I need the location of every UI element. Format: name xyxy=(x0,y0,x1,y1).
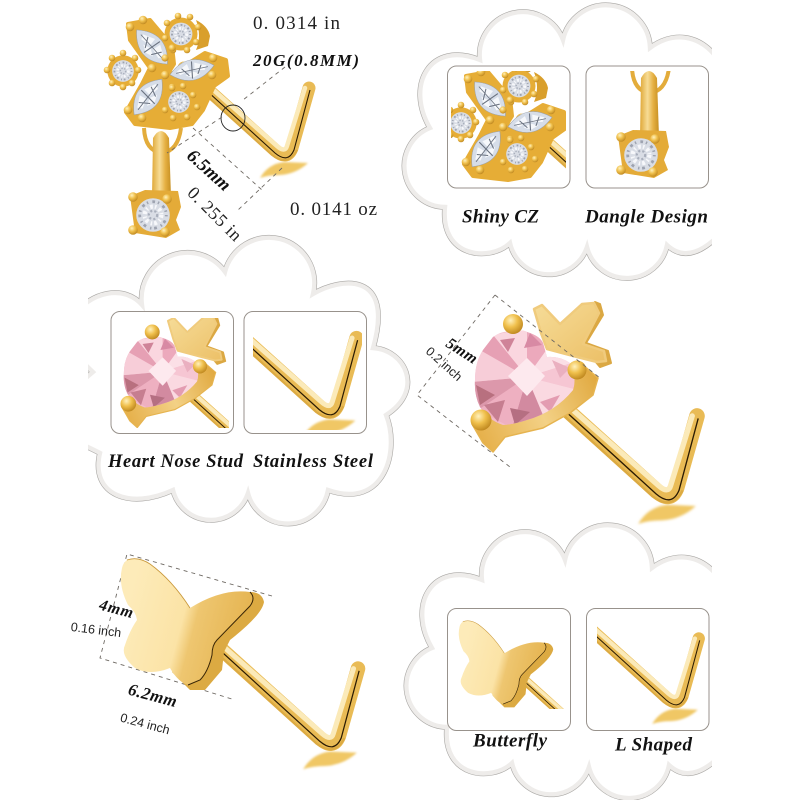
label: Butterfly: Butterfly xyxy=(472,730,548,752)
dimension lines xyxy=(100,554,272,700)
card: butterfly xyxy=(447,608,571,731)
card: dangle design xyxy=(586,66,708,188)
label: Shiny CZ: Shiny CZ xyxy=(462,206,539,228)
dimension lines xyxy=(167,67,285,210)
product: flower nose stud with dimensions xyxy=(104,13,377,245)
weight 0.0141 oz: 0. 0141 oz xyxy=(290,199,377,220)
card: heart nose stud xyxy=(110,311,234,434)
butterfly stud xyxy=(121,559,359,769)
size 6.2mm: 6.2mm xyxy=(126,680,180,711)
length 6.5mm: 6.5mm xyxy=(182,146,234,196)
flower cluster head xyxy=(104,13,228,128)
card: stainless steel xyxy=(244,311,367,434)
card: L shaped xyxy=(580,608,709,730)
panel: heart feature cloud xyxy=(60,238,407,524)
cloud outline xyxy=(406,525,724,798)
card: shiny CZ xyxy=(447,66,570,188)
length 0.255 in: 0. 255 in xyxy=(184,183,246,245)
label: Stainless Steel: Stainless Steel xyxy=(253,452,374,472)
panel: butterfly feature cloud xyxy=(406,525,724,798)
cloud outline xyxy=(404,5,722,278)
size 4mm: 4mm xyxy=(96,596,136,622)
panel: flower feature cloud xyxy=(404,5,722,278)
size 0.16 inch: 0.16 inch xyxy=(70,620,122,640)
heart stud xyxy=(470,302,698,524)
gauge ring xyxy=(221,105,245,131)
size 0.24 inch: 0.24 inch xyxy=(119,711,171,737)
cloud outline xyxy=(60,238,407,524)
product: butterfly nose stud with dimensions xyxy=(70,554,359,769)
dimension lines xyxy=(417,295,600,467)
gauge 20G: 20G(0.8MM) xyxy=(252,51,359,70)
size 0.2 inch: 0.2 inch xyxy=(423,344,465,384)
label: Dangle Design: Dangle Design xyxy=(584,206,708,228)
label: L Shaped: L Shaped xyxy=(614,734,692,756)
label: Heart Nose Stud: Heart Nose Stud xyxy=(107,452,244,472)
dangle charm xyxy=(128,128,181,238)
size 5mm: 5mm xyxy=(443,335,481,368)
product: heart nose stud with dimensions xyxy=(417,295,698,524)
length 0.0314 in: 0. 0314 in xyxy=(253,13,340,34)
L-shaped pin of flower stud xyxy=(184,64,310,178)
